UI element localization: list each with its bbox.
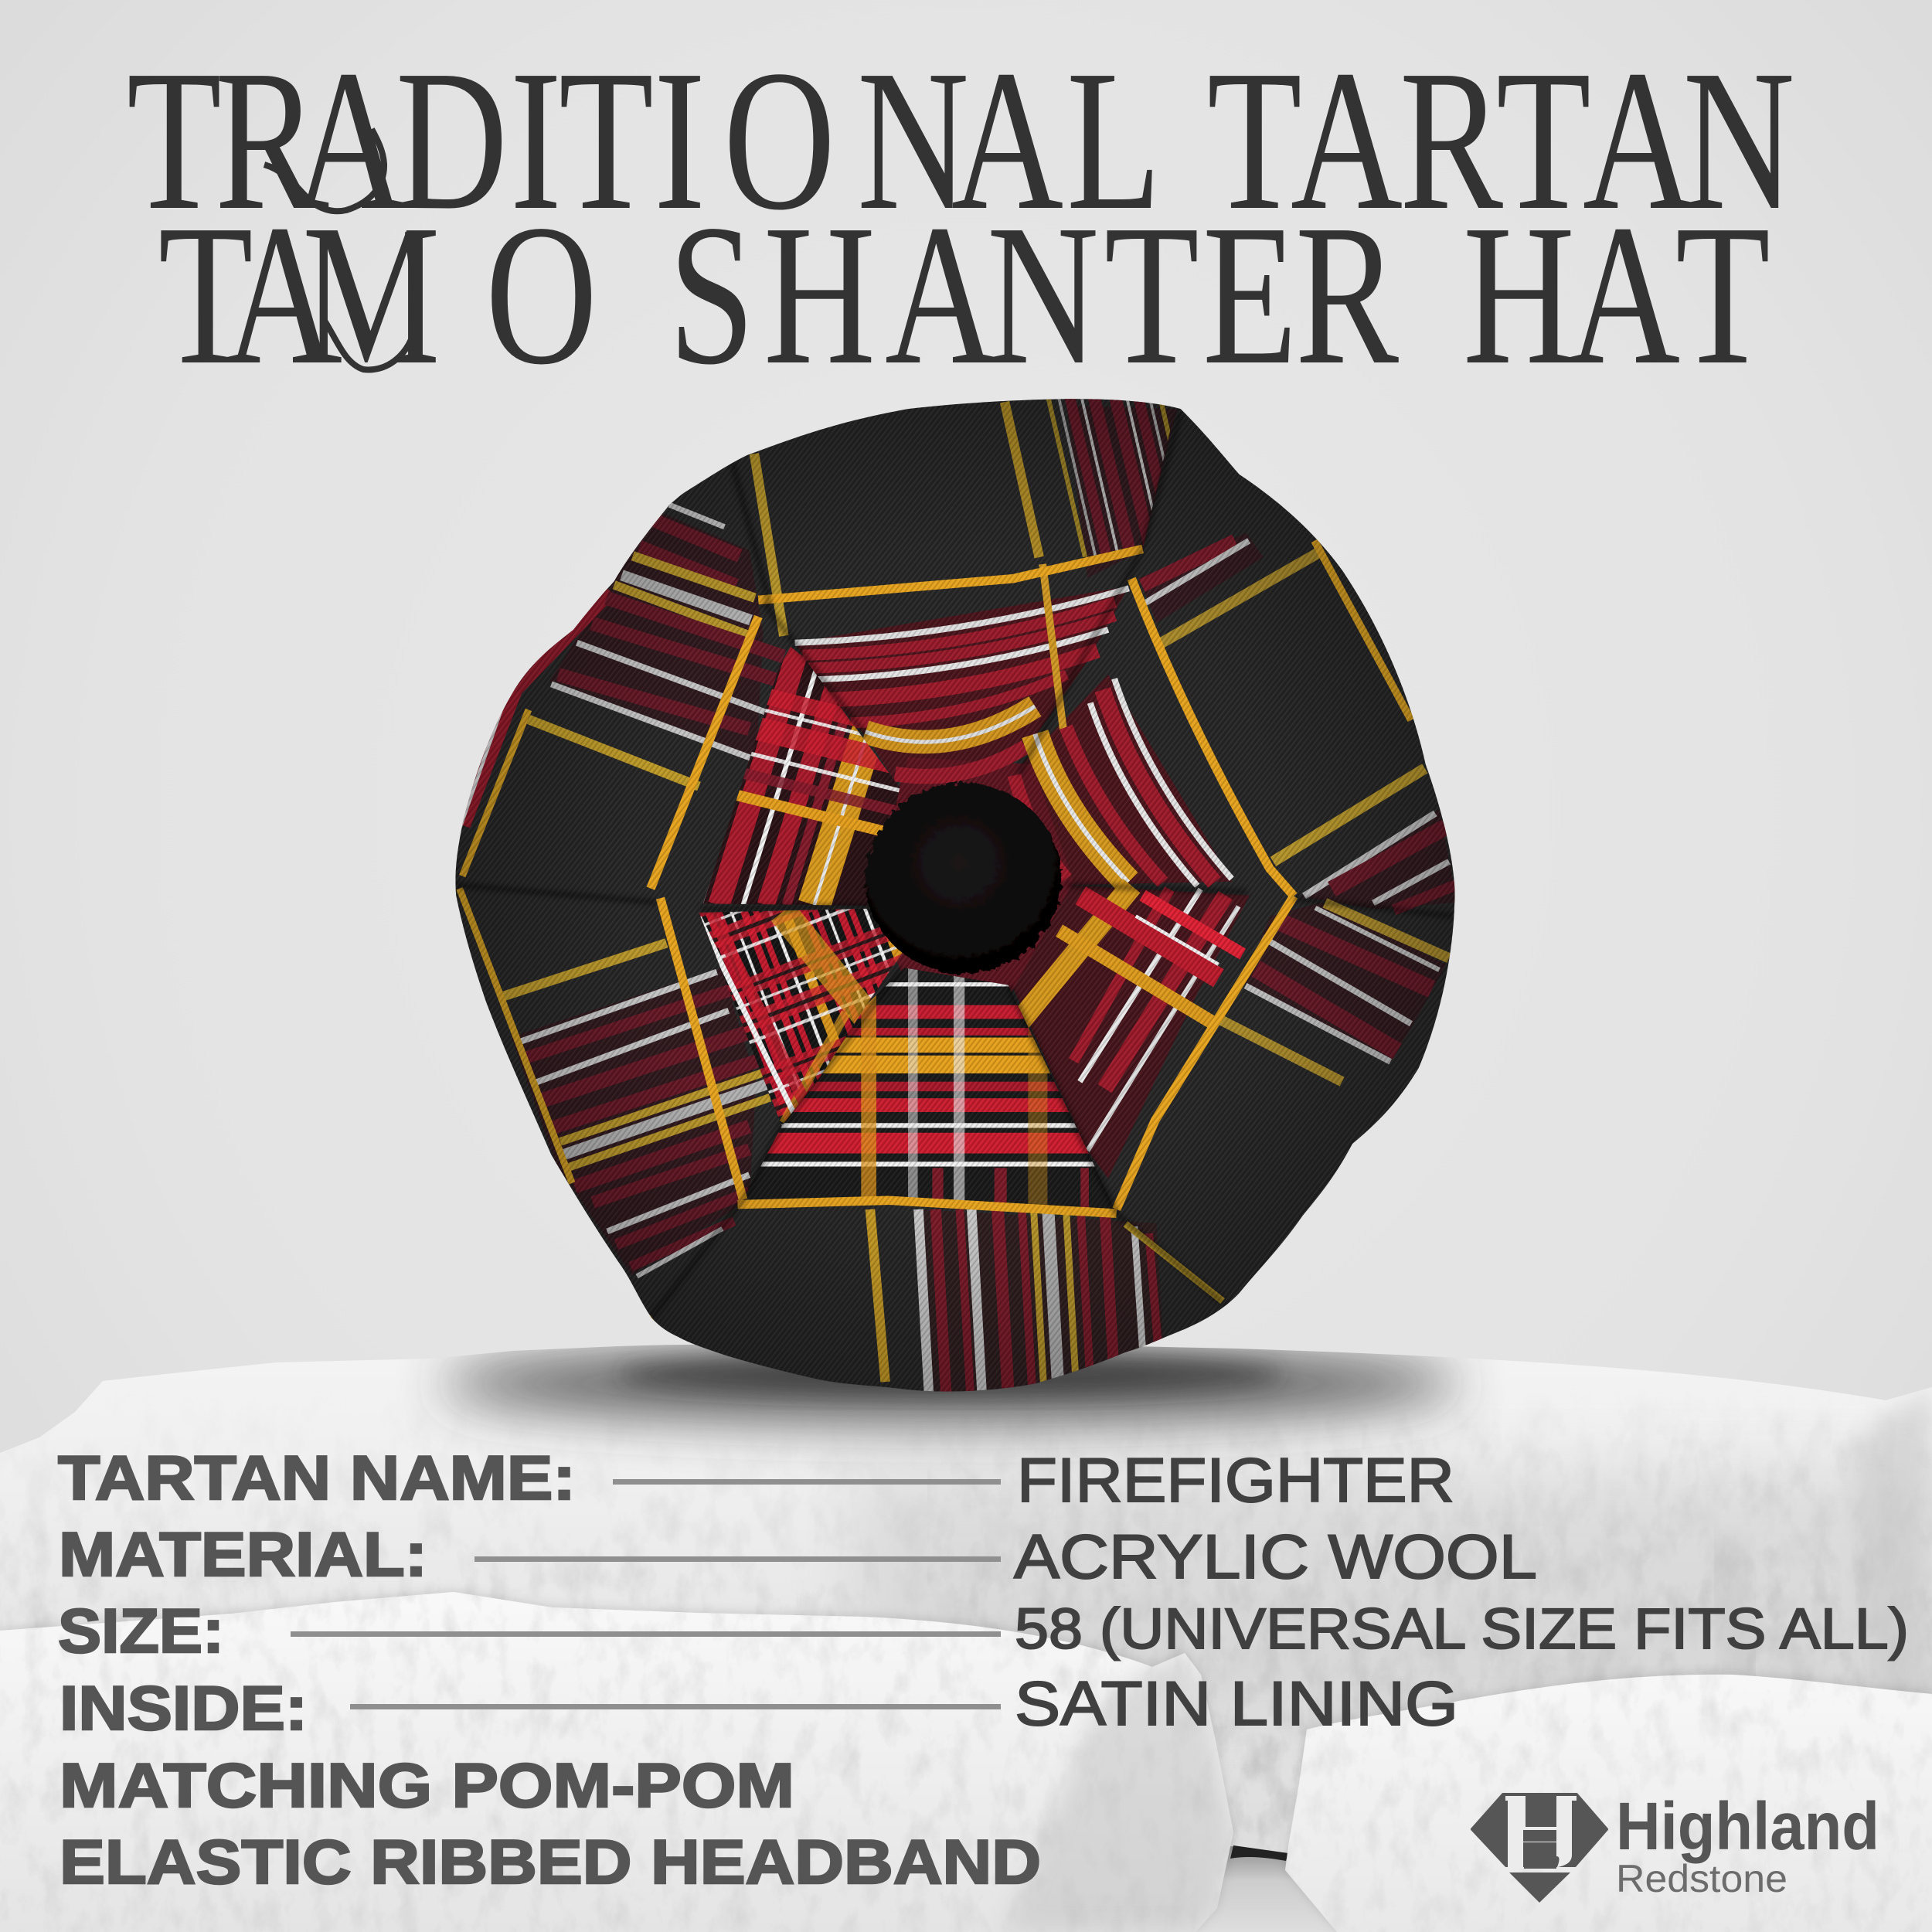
row: inside	[60, 1669, 1458, 1743]
inner panel: top	[795, 564, 1129, 777]
row: material	[59, 1520, 1537, 1592]
inner panel: upper left	[687, 622, 922, 909]
inner panel: lower left	[539, 787, 1054, 1270]
tone underlays for tartan bands	[512, 406, 1457, 1396]
hat	[456, 399, 1454, 1392]
inner panel: bottom	[729, 957, 1143, 1219]
inner panel: right	[1015, 679, 1232, 886]
hat shadow on rock	[440, 1346, 1461, 1420]
outer panel: bottom	[870, 1209, 1223, 1392]
logo mark	[1472, 1794, 1607, 1903]
logo wordmark Highland: Highland	[1616, 1789, 1879, 1864]
row: size: SIZE:	[58, 1597, 224, 1666]
row: material: MATERIAL:	[59, 1520, 427, 1590]
row: inside: INSIDE:	[60, 1674, 308, 1743]
outer panel: upper right	[1142, 541, 1456, 910]
row: material: ACRYLIC WOOL	[1014, 1522, 1537, 1592]
row: tartan name: TARTAN NAME:	[58, 1444, 576, 1513]
logo wordmark Redstone: Redstone	[1616, 1857, 1787, 1900]
ground gap between rocks	[1190, 1845, 1360, 1932]
rock: back slab	[0, 1345, 1932, 1850]
title line 1: TRADITIONAL TARTAN	[127, 29, 1795, 252]
panel seams	[456, 413, 1454, 1318]
row: tartan name: FIREFIGHTER	[1017, 1446, 1454, 1515]
title swash on A	[264, 129, 384, 211]
title line 2: TAM O SHANTER HAT	[158, 183, 1770, 406]
feature: headband: ELASTIC RIBBED HEADBAND	[60, 1828, 1041, 1897]
inner panel: lower right	[1018, 886, 1243, 1151]
rock: front right	[1275, 1669, 1932, 1932]
feature: pom-pom: MATCHING POM-POM	[60, 1751, 794, 1821]
logo: Highland Redstone	[1472, 1789, 1879, 1903]
fabric twill and edge shading	[411, 357, 1515, 1461]
outer panel: lower right	[1221, 903, 1449, 1082]
row: inside: SATIN LINING	[1015, 1669, 1458, 1739]
outer panel: upper left	[458, 454, 784, 876]
title	[127, 29, 1795, 406]
row: tartan name	[58, 1444, 1454, 1515]
row: size	[58, 1597, 1909, 1666]
outer panel: top	[1000, 399, 1170, 558]
title swash on M	[325, 232, 417, 369]
outer panel: lower left	[460, 889, 770, 1334]
pom-pom	[866, 783, 1061, 974]
hexagon seam lines	[651, 549, 1294, 1213]
specs list	[58, 1444, 1909, 1897]
row: size: 58 (UNIVERSAL SIZE FITS ALL)	[1015, 1597, 1909, 1661]
rock: front left	[0, 1584, 1252, 1932]
